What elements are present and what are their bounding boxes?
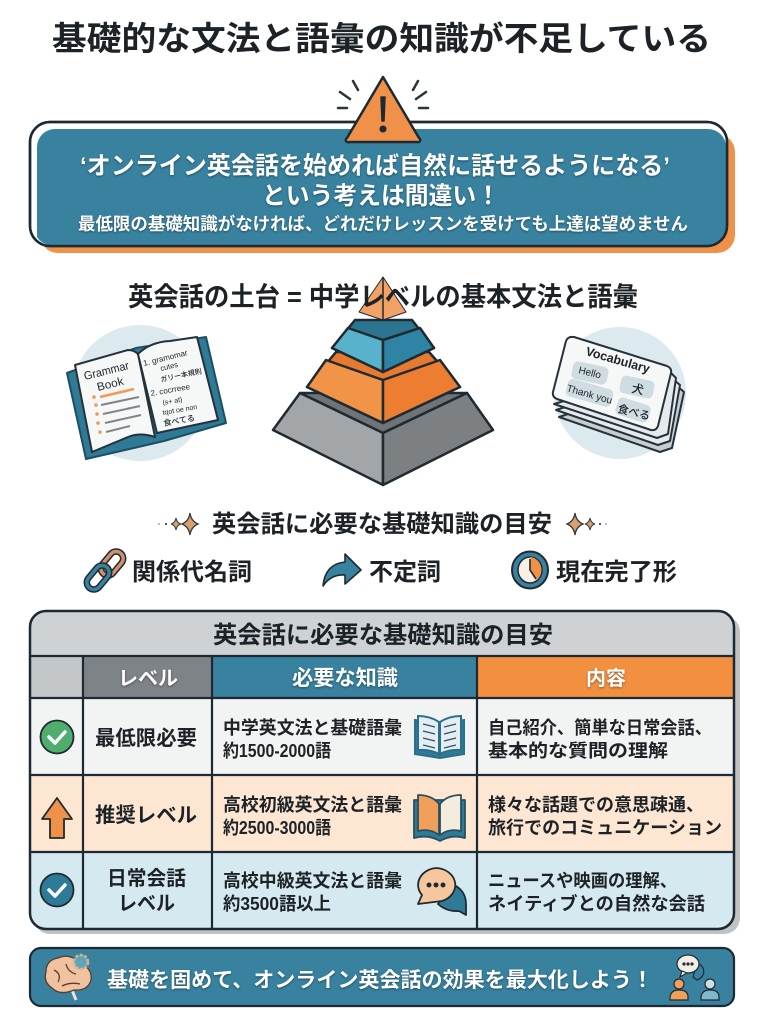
blue upper tier (332, 320, 434, 372)
banner headline (80, 152, 670, 210)
row: minimum: 中学英文法と基礎語彙 (223, 717, 402, 738)
row: minimum (30, 698, 734, 775)
row: daily conversation (30, 852, 734, 929)
icon: left sparkles (158, 513, 198, 535)
panel: requirements table (30, 611, 740, 934)
row: recommended: 推奨レベル (95, 804, 197, 827)
label: relative pronoun: 関係代名詞 (132, 559, 252, 586)
icon: grammar book: cutes (159, 360, 179, 373)
icon: clock (512, 552, 548, 588)
orange capstone (359, 277, 406, 320)
row: recommended: 様々な話題での意思疎通、 (488, 795, 704, 815)
row: minimum: 基本的な質問の理解 (488, 741, 668, 761)
icon: grammar book: (s+ at) (162, 397, 183, 407)
icon: vocabulary cards: 犬 (630, 380, 645, 397)
icon: curved arrow (323, 554, 361, 586)
orange middle tier (307, 352, 460, 423)
icon: brain with gear (45, 955, 91, 1000)
panel: footer banner (30, 948, 734, 1006)
label: infinitive: 不定詞 (369, 559, 441, 586)
table title bar: 英会話に必要な基礎知識の目安 (213, 622, 553, 649)
icon: right sparkles (567, 513, 607, 535)
row: daily conversation: レベル (118, 893, 175, 915)
icon: grammar book: Grammar (83, 360, 131, 383)
icon: warning triangle (338, 77, 428, 142)
chart: pyramid (273, 277, 493, 485)
icon: grammar book: ガリー本規則 (160, 366, 202, 384)
banner headline: という考えは間違い！ (262, 182, 500, 210)
icon: blue check (40, 874, 74, 906)
heading: knowledge guideline: 英会話に必要な基礎知識の目安 (212, 511, 552, 538)
row: recommended: 旅行でのコミュニケーション (488, 818, 722, 838)
icon: vocabulary cards: 食べる (616, 401, 652, 423)
row: daily conversation: ネイティブとの自然な会話 (488, 893, 705, 914)
icon: speech bubbles (418, 868, 466, 915)
icon: grammar book: tqot oe non (162, 404, 198, 417)
table header row: 内容 (586, 667, 626, 690)
row: minimum: 約1500-2000語 (223, 741, 331, 761)
icon: grammar book: 2. cocrreee (150, 382, 191, 398)
table header row: レベル (118, 668, 178, 690)
icon: chain link (84, 549, 126, 592)
row: daily conversation: 約3500語以上 (223, 894, 331, 914)
title: 基礎的な文法と語彙の知識が不足している (52, 20, 711, 57)
icon: grammar book: Book (96, 376, 125, 394)
icon: orange up arrow (42, 798, 72, 838)
table header row: 必要な知識 (292, 667, 398, 690)
row: minimum: 最低限必要 (95, 727, 197, 750)
panel: warning banner (30, 122, 735, 253)
row: daily conversation: 日常会話 (107, 867, 186, 890)
icon: grammar book (67, 325, 226, 461)
label: present perfect: 現在完了形 (556, 559, 677, 586)
icon: green check (40, 720, 74, 754)
icon: orange open book (414, 795, 465, 841)
row: daily conversation: 高校中級英文法と語彙 (223, 870, 402, 891)
table header row (30, 656, 734, 698)
icon: vocabulary cards: Vocabulary (584, 344, 652, 376)
banner headline: ‘オンライン英会話を始めれば自然に話せるようになる’ (80, 152, 670, 180)
icon: open book outline (415, 716, 464, 758)
row: minimum: 自己紹介、簡単な日常会話、 (488, 717, 712, 738)
heading: foundation: 英会話の土台 = 中学レベルの基本文法と語彙 (128, 282, 638, 312)
table title bar (30, 611, 734, 656)
icon: grammar book: 食べてる (163, 413, 196, 428)
row: daily conversation: ニュースや映画の理解、 (488, 871, 677, 891)
row: recommended: 高校初級英文法と語彙 (223, 794, 402, 815)
icon: vocabulary cards: Thank you (565, 383, 613, 407)
row: recommended: 約2500-3000語 (223, 818, 331, 838)
row: recommended (30, 775, 734, 852)
icon: grammar book: 1. gramomar (142, 348, 189, 368)
banner subtext: 最低限の基礎知識がなければ、どれだけレッスンを受けても上達は望めません (78, 214, 688, 234)
icon: people talking (670, 955, 719, 1000)
icon: vocabulary cards (553, 327, 686, 459)
footer message: 基礎を固めて、オンライン英会話の効果を最大化しよう！ (107, 969, 653, 992)
grey base tier (273, 393, 493, 485)
icon: vocabulary cards: Hello (577, 365, 602, 382)
